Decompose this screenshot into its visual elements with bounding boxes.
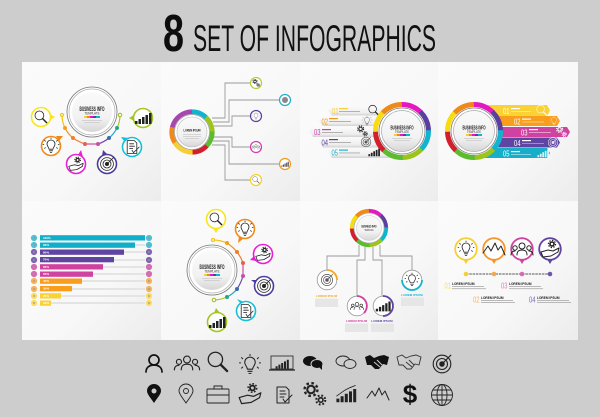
bar labels: 30% [43, 286, 49, 290]
tab 01: 01 [332, 106, 339, 116]
bubble: hand [250, 244, 272, 264]
icon strip [146, 352, 452, 409]
icon: bulb [240, 354, 260, 373]
node: gears [250, 78, 262, 88]
bubble: target [98, 150, 116, 174]
bubble: document [236, 299, 256, 320]
icon: briefcase [207, 386, 229, 403]
bubble: search [32, 108, 55, 126]
arc connector [212, 238, 245, 302]
icon: zigzag [367, 388, 389, 400]
bar tracks [40, 237, 145, 304]
arrow 03: 03 [521, 128, 528, 138]
bubble: document [121, 137, 142, 156]
ring: LOREM IPSUM [184, 128, 200, 132]
pin: idea [455, 238, 477, 276]
connectors [212, 83, 279, 180]
connectors [327, 245, 412, 296]
bar labels: 20% [43, 294, 49, 298]
central disc: TEMPLATE [84, 112, 100, 116]
node: people [250, 142, 262, 152]
tab 02: 02 [322, 116, 328, 126]
title [163, 5, 436, 63]
icon: rising chart [336, 385, 356, 402]
panel: coloured arrows with ring [437, 62, 578, 201]
node: chart [280, 158, 290, 170]
text: 04 [529, 294, 571, 304]
panel: org chart infographic [300, 201, 438, 340]
bubble: idea [236, 220, 254, 243]
label: chart: LOREM IPSUM [371, 319, 393, 323]
panel: vertical arc infographic [161, 201, 300, 340]
bar labels: 60% [43, 265, 49, 269]
pin: hand [539, 238, 561, 276]
arrow 01 [480, 105, 550, 116]
text: 02: LOREM IPSUM [481, 296, 504, 300]
bar labels: 90% [43, 243, 49, 247]
icon: chat outline [336, 356, 356, 368]
bar markers [32, 236, 151, 305]
bar labels: 10% [43, 301, 49, 305]
text: 04: 04 [529, 294, 536, 304]
node: target [317, 270, 337, 290]
ring: TEMPLATE [364, 229, 374, 232]
icon: laptop chart [269, 356, 295, 370]
node: idea [250, 110, 262, 122]
arrow 04: 04 [514, 138, 521, 148]
panel: tree connector infographic [161, 62, 300, 201]
bar labels: 80% [43, 250, 49, 254]
arrow 05: 05 [503, 148, 510, 158]
panel: tabs with ring [300, 62, 439, 201]
bubble: chart [208, 308, 226, 332]
icon: chat solid [303, 356, 323, 370]
tab 04: 04 [322, 138, 328, 148]
node: target [280, 94, 290, 106]
bubble: target [251, 276, 274, 296]
text: 04: LOREM IPSUM [537, 296, 560, 300]
bar labels: 50% [43, 272, 49, 276]
text: 03 [501, 280, 543, 290]
icon: globe [432, 384, 452, 406]
bar labels: 100% [43, 236, 51, 240]
ring: BUSINESS INFO [462, 125, 486, 131]
arrow 04 [490, 138, 560, 148]
arc connector [60, 113, 122, 146]
arrow 01: 01 [503, 106, 510, 116]
pin: people [511, 238, 533, 276]
node: search [250, 174, 262, 186]
timeline [466, 273, 551, 275]
arrow 02 [490, 116, 560, 126]
text: 03: LOREM IPSUM [509, 282, 532, 286]
bar labels: 70% [43, 258, 49, 262]
icon: target [433, 355, 451, 373]
central disc: BUSINESS INFO [200, 265, 225, 271]
ring [365, 94, 439, 168]
icon: document [277, 387, 292, 403]
bar labels [43, 236, 51, 305]
bars [40, 235, 145, 306]
text: 01: LOREM IPSUM [452, 282, 475, 286]
ring: TEMPLATE [395, 130, 409, 134]
arrow 02: 02 [514, 116, 521, 126]
text: 02: 02 [473, 294, 480, 304]
icon: hand gear [239, 384, 261, 404]
label: idea: LOREM IPSUM [401, 293, 423, 297]
panel: timeline pins [438, 201, 578, 340]
icon: handshake outline [397, 355, 421, 369]
icon: group [174, 356, 200, 370]
ring: BUSINESS INFO [362, 224, 377, 228]
ring: TEMPLATE [467, 130, 481, 134]
bubble: hand [66, 150, 86, 174]
text: 03: 03 [501, 280, 508, 290]
arrow 03 [500, 126, 570, 138]
panel: horizontal bar chart [22, 201, 161, 340]
node: chart [373, 296, 393, 316]
central disc [187, 245, 237, 295]
icon: pin solid [147, 384, 161, 403]
icon: handshake solid [365, 355, 389, 369]
arrow 05 [480, 148, 550, 158]
ring [345, 204, 393, 252]
tab 03: 03 [314, 127, 321, 137]
title: 8 [163, 5, 184, 63]
icon: pin outline [179, 384, 193, 403]
panel: radial arc infographic [22, 62, 161, 201]
text: 02 [473, 294, 515, 304]
label: target: LOREM IPSUM [316, 294, 338, 298]
tab 05: 05 [332, 148, 338, 158]
label: people: LOREM IPSUM [346, 319, 368, 323]
bubble: idea [42, 136, 63, 156]
icon: person [146, 355, 162, 372]
icon: dollar: $ [403, 379, 418, 409]
central disc: BUSINESS INFO [80, 107, 105, 113]
central disc: TEMPLATE [204, 270, 220, 274]
central disc [67, 87, 117, 137]
pin: zigzag [483, 238, 505, 276]
bubble: search [206, 210, 226, 233]
ring: BUSINESS INFO [390, 125, 414, 131]
node: idea [402, 270, 422, 290]
icon: gears [305, 383, 325, 404]
node: people [347, 296, 367, 316]
bar labels: 40% [43, 279, 49, 283]
text: 01 [444, 280, 486, 290]
bubble: chart [129, 108, 152, 128]
ring [437, 94, 511, 168]
text: 01: 01 [444, 280, 451, 290]
icon: search [208, 352, 227, 371]
